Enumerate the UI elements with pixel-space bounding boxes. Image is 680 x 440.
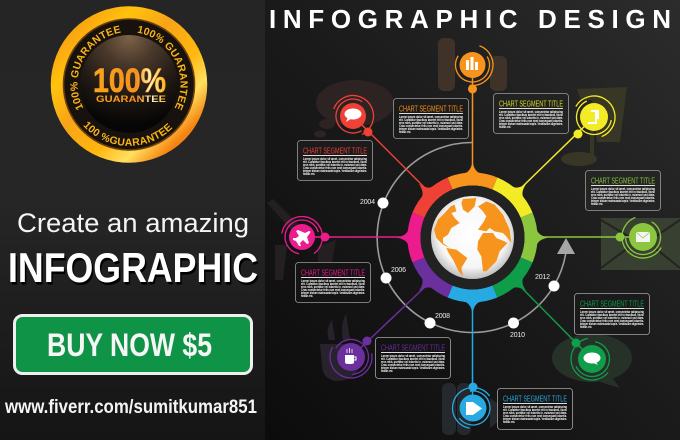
heading: infographic: INFOGRAPHIC bbox=[8, 244, 258, 291]
connector: green bbox=[518, 284, 592, 359]
timeline arc bbox=[377, 142, 575, 332]
text box: orange: elit. Curabitur faucibus laoreet elit in faucibus. Nunc bbox=[399, 118, 463, 122]
text box: green: CHART SEGMENT TITLE bbox=[580, 300, 644, 308]
icon: lime envelope bbox=[614, 208, 672, 266]
connector: yellow bbox=[518, 117, 594, 191]
text box: lime: Integer dictum malesuada turpis. Vestibulum dignissim. bbox=[591, 199, 655, 203]
text box: pink: finibus est. bbox=[301, 294, 313, 298]
text box: blue bbox=[498, 388, 572, 430]
text box: red: Integer dictum malesuada turpis. Vestibulum dignissim. bbox=[303, 169, 367, 173]
text box: pink: elit. Curabitur faucibus laoreet elit in faucibus. Nunc bbox=[301, 282, 365, 286]
text box: blue: elit. Curabitur faucibus laoreet elit in faucibus. Nunc bbox=[503, 408, 567, 412]
text box: blue: Lorem ipsum dolor sit amet, consectetur adipiscing bbox=[503, 405, 567, 409]
year marker: 2008: 2008 bbox=[435, 313, 450, 320]
connector: red bbox=[353, 116, 428, 191]
connector: lime bbox=[537, 236, 643, 238]
year marker: 2012: 2012 bbox=[535, 274, 550, 281]
text box: green: Integer dictum malesuada turpis. Vestibulum dignissim. bbox=[580, 322, 644, 326]
text box: blue: CHART SEGMENT TITLE bbox=[503, 394, 567, 404]
connector: blue bbox=[472, 302, 474, 408]
heading: create an amazing: Create an amazing bbox=[17, 208, 249, 238]
text box: yellow: Cras consectetur felis non erat consequat lobortis. bbox=[499, 119, 563, 123]
text box: pink: Cras consectetur felis non erat consequat lobortis. bbox=[301, 288, 365, 292]
text box: pink: CHART SEGMENT TITLE bbox=[301, 268, 365, 278]
text box: purple: Integer dictum malesuada turpis. Vestibulum dignissim. bbox=[381, 366, 445, 370]
left panel background bbox=[0, 0, 265, 440]
text box: purple bbox=[376, 338, 450, 378]
ghost icon: music note bbox=[561, 87, 627, 166]
title: INFOGRAPHIC DESIGN bbox=[269, 4, 671, 34]
text box: yellow bbox=[494, 94, 568, 134]
guarantee badge: 100% GUARANTEE bbox=[138, 26, 188, 110]
icon: red speech bubble bbox=[327, 90, 379, 142]
text box: lime: eros nibh, porttitor vel lobortis in, euismod sed diam. bbox=[591, 193, 655, 197]
year marker: 2006 bbox=[380, 267, 406, 284]
connector: pink bbox=[302, 236, 408, 238]
icon: pink airplane bbox=[278, 213, 330, 261]
ghost icon: blue play bbox=[442, 383, 510, 435]
text box: lime: elit. Curabitur faucibus laoreet elit in faucibus. Nunc bbox=[591, 190, 655, 194]
text box: lime: Lorem ipsum dolor sit amet, consectetur adipiscing bbox=[591, 187, 655, 191]
text box: orange: Integer dictum malesuada turpis. Vestibulum dignissim. bbox=[399, 127, 463, 131]
text box: orange: CHART SEGMENT TITLE bbox=[399, 104, 463, 114]
colour wheel bbox=[396, 162, 548, 314]
text box: lime: finibus est. bbox=[591, 202, 603, 206]
ghost icon: red speech bubble bbox=[314, 80, 394, 138]
heading: infographic: INFOGRAPHIC bbox=[10, 246, 260, 294]
guarantee badge: 100% bbox=[93, 62, 166, 100]
text box: red: elit. Curabitur faucibus laoreet elit in faucibus. Nunc bbox=[303, 160, 367, 164]
text box: green: Cras consectetur felis non erat consequat lobortis. bbox=[580, 319, 644, 323]
text box: orange: Cras consectetur felis non erat consequat lobortis. bbox=[399, 124, 463, 128]
icon: yellow music bbox=[565, 88, 623, 146]
text box: red: Cras consectetur felis non erat consequat lobortis. bbox=[303, 166, 367, 170]
text box: purple: elit. Curabitur faucibus laoreet elit in faucibus. Nunc bbox=[381, 357, 445, 361]
year marker: 2010: 2010 bbox=[510, 332, 525, 339]
guarantee badge: GUARANTEE bbox=[96, 94, 167, 105]
text box: green: finibus est. bbox=[580, 325, 592, 329]
right panel background bbox=[265, 0, 680, 440]
text box: blue: Cras consectetur felis non erat consequat lobortis. bbox=[503, 414, 567, 418]
year marker: 2004: 2004 bbox=[360, 199, 375, 206]
icon: purple coffee cup bbox=[327, 333, 375, 381]
text box: blue: eros nibh, porttitor vel lobortis in, euismod sed diam. bbox=[503, 411, 567, 415]
ghost icon: envelope bbox=[601, 218, 680, 270]
text box: blue: finibus est. bbox=[503, 420, 515, 424]
year marker: 2008 bbox=[424, 313, 450, 328]
button: buy now: BUY NOW $5 bbox=[47, 327, 212, 363]
text box: blue: Integer dictum malesuada turpis. Vestibulum dignissim. bbox=[503, 417, 567, 421]
text box: red: eros nibh, porttitor vel lobortis in, euismod sed diam. bbox=[303, 163, 367, 167]
year marker: 2006: 2006 bbox=[391, 267, 406, 274]
text box: green: elit. Curabitur faucibus laoreet elit in faucibus. Nunc bbox=[580, 313, 644, 317]
text box: red: CHART SEGMENT TITLE bbox=[303, 146, 367, 156]
text box: yellow: finibus est. bbox=[499, 125, 511, 129]
website url: www.fiverr.com/sumitkumar851 bbox=[4, 396, 257, 418]
guarantee badge bbox=[50, 6, 208, 163]
ghost icon: coffee cup bbox=[320, 314, 358, 381]
icon: orange bars bbox=[446, 39, 499, 94]
globe bbox=[420, 186, 524, 290]
ghost icon: green speech bubbles bbox=[552, 334, 632, 388]
text box: purple: Lorem ipsum dolor sit amet, consectetur adipiscing bbox=[381, 354, 445, 358]
text box: green: eros nibh, porttitor vel lobortis in, euismod sed diam. bbox=[580, 316, 644, 320]
text box: orange: finibus est. bbox=[399, 130, 411, 134]
text box: yellow: CHART SEGMENT TITLE bbox=[499, 100, 563, 108]
text box: purple: eros nibh, porttitor vel lobortis in, euismod sed diam. bbox=[381, 360, 445, 364]
year marker: 2010 bbox=[508, 318, 525, 339]
text box: orange: eros nibh, porttitor vel lobortis in, euismod sed diam. bbox=[399, 121, 463, 125]
icon: green speech bubble bbox=[562, 329, 622, 389]
text box: yellow: Integer dictum malesuada turpis. Vestibulum dignissim. bbox=[499, 122, 563, 126]
icon: blue play bbox=[449, 382, 497, 432]
text box: orange: Lorem ipsum dolor sit amet, consectetur adipiscing bbox=[399, 115, 463, 119]
text box: pink bbox=[296, 262, 370, 302]
text box: red bbox=[298, 140, 372, 180]
button: buy now bbox=[14, 316, 252, 374]
text box: pink: Lorem ipsum dolor sit amet, consectetur adipiscing bbox=[301, 279, 365, 283]
text box: purple: CHART SEGMENT TITLE bbox=[381, 344, 445, 352]
text box: green: Lorem ipsum dolor sit amet, consectetur adipiscing bbox=[580, 310, 644, 314]
text box: red: Lorem ipsum dolor sit amet, consectetur adipiscing bbox=[303, 157, 367, 161]
text box: green bbox=[574, 294, 650, 334]
text box: purple: finibus est. bbox=[381, 369, 393, 373]
text box: pink: eros nibh, porttitor vel lobortis in, euismod sed diam. bbox=[301, 285, 365, 289]
ghost icon: airplane bbox=[267, 199, 336, 280]
guarantee badge: 100 %GUARANTEE bbox=[83, 122, 172, 146]
text box: yellow: elit. Curabitur faucibus laoreet elit in faucibus. Nunc bbox=[499, 113, 563, 117]
ghost icon: orange bars bbox=[438, 38, 507, 91]
guarantee badge: 100% GUARANTEE bbox=[70, 26, 121, 110]
text box: red: finibus est. bbox=[303, 172, 315, 176]
year marker: 2012 bbox=[535, 274, 560, 292]
text box: orange bbox=[394, 98, 468, 138]
text box: yellow: eros nibh, porttitor vel lobortis in, euismod sed diam. bbox=[499, 116, 563, 120]
connector: orange bbox=[472, 65, 474, 172]
text box: lime bbox=[586, 170, 660, 210]
connector: purple bbox=[351, 284, 428, 357]
text box: lime: Cras consectetur felis non erat consequat lobortis. bbox=[591, 196, 655, 200]
text box: pink: Integer dictum malesuada turpis. Vestibulum dignissim. bbox=[301, 291, 365, 295]
text box: purple: Cras consectetur felis non erat consequat lobortis. bbox=[381, 363, 445, 367]
year marker: 2004 bbox=[360, 198, 388, 208]
text box: yellow: Lorem ipsum dolor sit amet, consectetur adipiscing bbox=[499, 110, 563, 114]
